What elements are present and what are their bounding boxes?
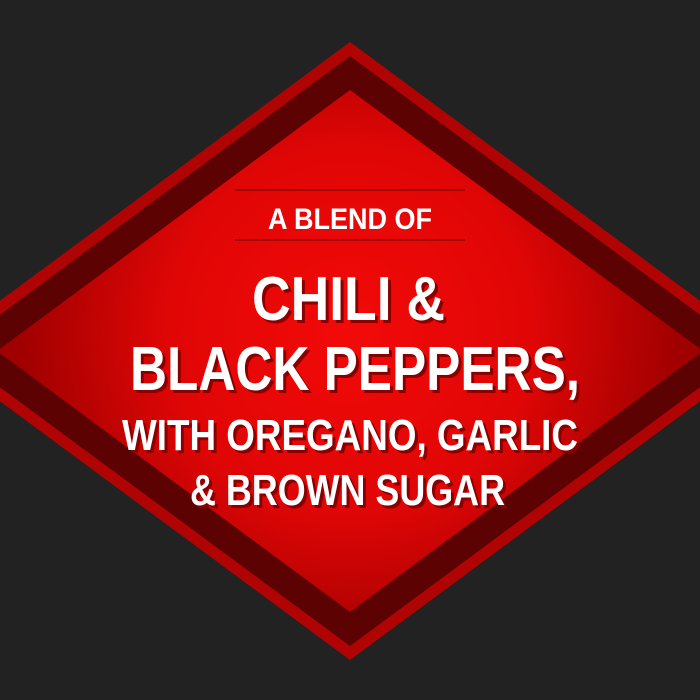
heading text [122, 265, 583, 518]
heading text: WITH OREGANO, GARLIC [125, 414, 581, 463]
heading text: CHILI & [255, 268, 448, 337]
diamond: inner panel [0, 90, 700, 612]
subheading: A BLEND OF: A BLEND OF [268, 203, 432, 236]
divider lines [235, 190, 465, 240]
heading text: BLACK PEPPERS, [130, 335, 580, 404]
heading text: WITH OREGANO, GARLIC [122, 411, 578, 460]
heading text: CHILI & [252, 265, 445, 334]
heading text: & BROWN SUGAR [193, 469, 508, 518]
heading text: BLACK PEPPERS, [133, 338, 583, 407]
heading text: & BROWN SUGAR [190, 466, 505, 515]
